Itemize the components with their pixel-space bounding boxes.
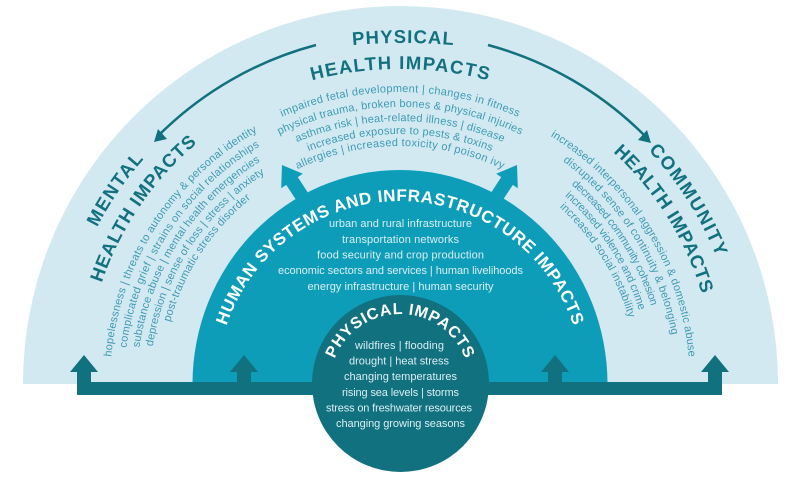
text block: physical health impacts list: increased exposure to pests & toxins	[306, 127, 492, 151]
heading: human systems and infrastructure impacts: HUMAN SYSTEMS AND INFRASTRUCTURE IMPACTS	[216, 189, 584, 325]
text block: physical health impacts list: asthma risk | heat-related illness | disease	[296, 113, 504, 142]
heading: mental health impacts: MENTAL	[86, 156, 144, 226]
text block: physical health impacts list: physical trauma, broken bones & physical injuries	[278, 99, 522, 136]
heading: physical health impacts second line: HEALTH IMPACTS	[310, 56, 490, 80]
panel: physical impacts circle	[312, 295, 489, 472]
text block: physical health impacts list: impaired fetal development | changes in fitness	[280, 84, 520, 117]
text block: mental health impacts list: complicated grief | strains on social relationships	[120, 142, 259, 348]
text block: physical impacts list: wildfires | flooding	[354, 340, 444, 352]
text block: human systems list: economic sectors and services | human livelihoods	[278, 265, 524, 277]
arrow: physical to community health	[488, 45, 651, 143]
heading: physical health impacts: PHYSICAL	[352, 30, 453, 45]
heading: mental health impacts second line: HEALTH IMPACTS	[90, 136, 195, 282]
heading: community health impacts second line: HEALTH IMPACTS	[614, 144, 713, 292]
text block: physical impacts list	[326, 340, 472, 430]
text block: mental health impacts list: hopelessness | threats to autonomy & personal identity	[103, 126, 256, 356]
text block: mental health impacts list: depression | sense of loss | stress | anxiety	[146, 169, 263, 346]
panel: human systems and infrastructure semicircle	[192, 170, 608, 384]
text block: human systems list: energy infrastructure | human security	[308, 281, 494, 293]
text block: human systems list: transportation networks	[342, 234, 460, 246]
text block: human systems list: food security and crop production	[317, 250, 484, 262]
text block: mental health impacts list: substance abuse | mental health emergencies	[134, 157, 260, 348]
text block: community health impacts list: increased interpersonal aggression & domestic abuse	[551, 130, 694, 356]
text block: human systems list: urban and rural infrastructure	[329, 218, 472, 230]
heading: community health impacts: COMMUNITY	[651, 144, 728, 252]
panel: outer health impacts semicircle	[23, 6, 778, 384]
arrow base: horizontal bar with upward arrows	[70, 355, 729, 395]
text block: physical impacts list: rising sea levels | storms	[342, 387, 460, 399]
text block: physical health impacts list: allergies | increased toxicity of poison ivy	[296, 138, 505, 170]
text block: physical impacts list: drought | heat stress	[349, 356, 450, 368]
text block: physical impacts list: stress on freshwater resources	[326, 402, 472, 414]
text block: community health impacts list: increased violence and crime	[565, 190, 644, 310]
text block: community health impacts list: decreased community cohesion	[572, 181, 656, 306]
text block: mental health impacts list: post-traumatic stress disorder	[164, 194, 250, 322]
text block: human systems list	[278, 218, 524, 293]
text block: community health impacts list: disrupted sense of continuity & belonging	[564, 157, 678, 334]
text block: physical impacts list: changing temperatures	[344, 371, 458, 383]
text block: physical health impacts list	[278, 84, 522, 170]
arrow: physical to mental health	[154, 45, 316, 142]
heading: physical impacts: PHYSICAL IMPACTS	[325, 303, 474, 358]
text block: community health impacts list: increased social instability	[560, 202, 634, 316]
arrow: human systems to physical health, right	[485, 165, 518, 210]
arrow: human systems to physical health, left	[281, 165, 314, 210]
text block: physical impacts list: changing growing seasons	[336, 418, 466, 430]
